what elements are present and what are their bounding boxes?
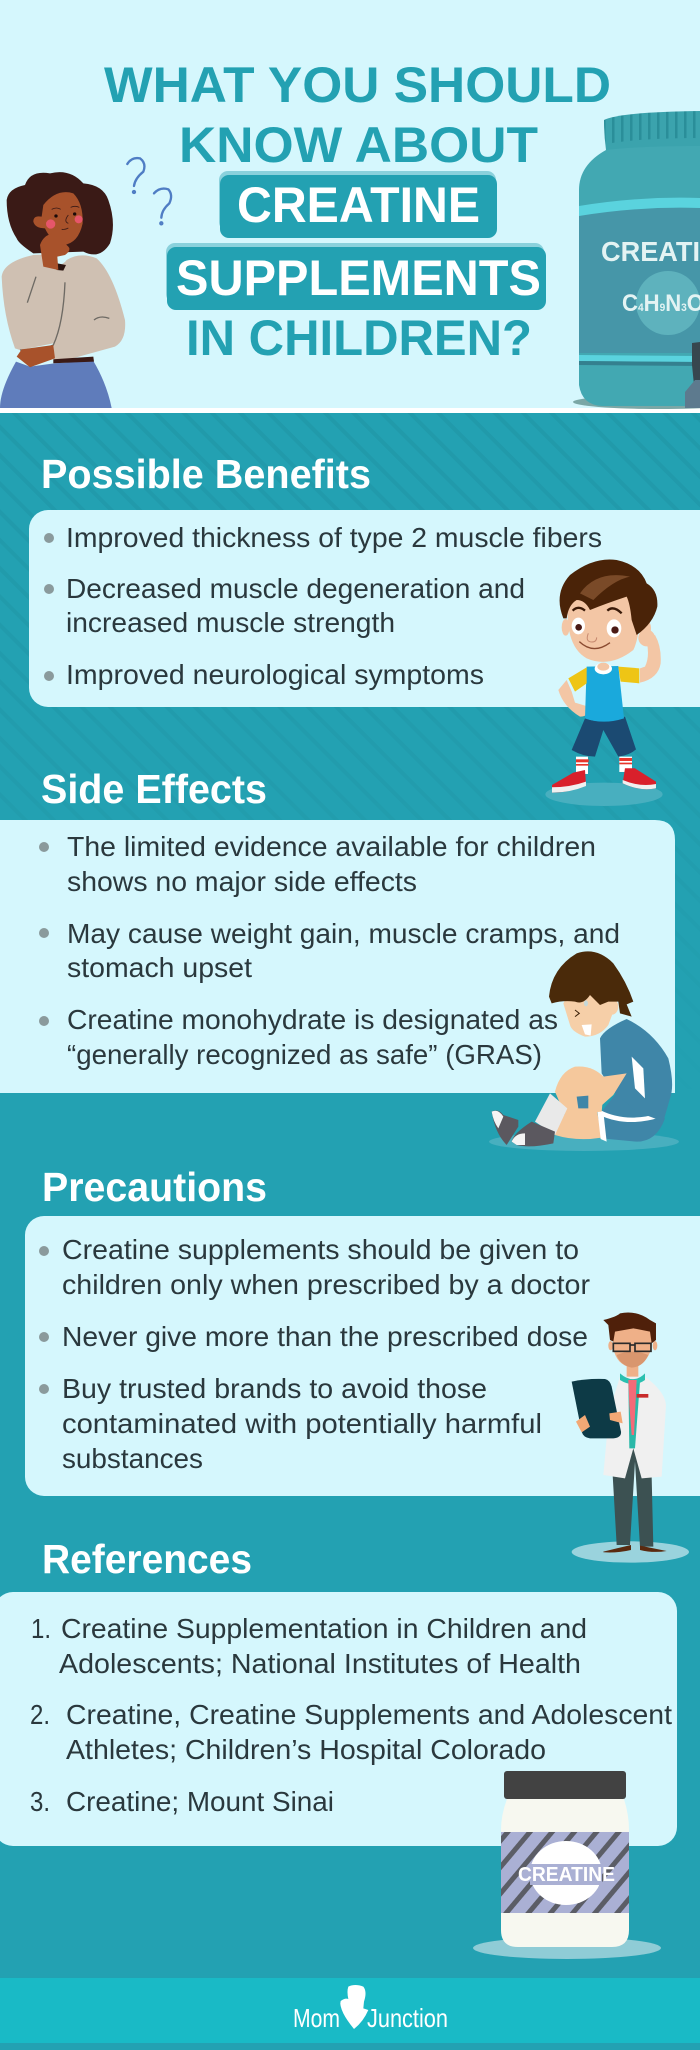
title: CREATINE (237, 177, 480, 233)
panel: side effects: Creatine monohydrate is designated as (67, 1004, 558, 1035)
icon: thinking woman (0, 172, 125, 408)
panel: side effects: shows no major side effects (67, 866, 417, 897)
heading: possible benefits: Possible Benefits (41, 451, 371, 497)
white divider band (0, 408, 700, 413)
panel: precautions: contaminated with potentially harmful (62, 1408, 542, 1439)
panel: precautions: children only when prescribed by a doctor (62, 1269, 590, 1300)
panel: possible benefits: Decreased muscle degeneration and (66, 573, 525, 604)
panel: possible benefits: increased muscle strength (66, 607, 395, 638)
panel: precautions: Never give more than the prescribed dose (62, 1321, 588, 1352)
panel: precautions: Creatine supplements should be given to (62, 1234, 579, 1265)
title: KNOW ABOUT (179, 117, 538, 173)
logo: MomJunction (293, 1985, 448, 2033)
panel: references (0, 1592, 677, 1846)
panel: references: Adolescents; National Institutes of Health (59, 1648, 581, 1679)
heading: precautions: Precautions (42, 1164, 267, 1210)
panel: side effects: stomach upset (67, 952, 252, 983)
title: WHAT YOU SHOULD (104, 57, 611, 113)
icon: creatine bottle (573, 111, 700, 409)
panel: possible benefits: Improved neurological symptoms (66, 659, 484, 690)
title (104, 57, 611, 366)
logo: MomJunction: Junction (367, 2003, 448, 2033)
header background (0, 0, 700, 408)
title: IN CHILDREN? (186, 310, 532, 366)
icon: creatine jar: CREATINE (518, 1864, 615, 1886)
panel: side effects: “generally recognized as safe” (GRAS) (67, 1039, 542, 1070)
heading: references: References (42, 1536, 252, 1582)
heading: side effects: Side Effects (41, 766, 267, 812)
panel: references: Creatine Supplementation in Children and (61, 1613, 587, 1644)
logo: MomJunction: Mom (293, 2003, 340, 2033)
panel: references: Creatine, Creatine Supplements and Adolescent (66, 1699, 672, 1730)
panel: references: 3. (30, 1786, 50, 1817)
icon: creatine jar (473, 1771, 661, 1959)
icon: question marks (127, 158, 171, 224)
panel: references: Athletes; Children’s Hospital Colorado (66, 1734, 546, 1765)
panel: references: 2. (30, 1699, 50, 1730)
panel: side effects (0, 820, 675, 1093)
icon: flexing boy (545, 559, 663, 806)
panel: references: 1. (31, 1613, 51, 1644)
main teal background (0, 413, 700, 1979)
title: SUPPLEMENTS (176, 250, 541, 306)
icon: doctor with tablet (572, 1312, 689, 1563)
panel: possible benefits (29, 510, 700, 707)
panel: references: Creatine; Mount Sinai (66, 1786, 334, 1817)
panel: side effects: May cause weight gain, muscle cramps, and (67, 918, 620, 949)
panel: precautions (25, 1216, 700, 1496)
panel: possible benefits: Improved thickness of type 2 muscle fibers (66, 522, 602, 553)
footer band (0, 1978, 700, 2043)
icon: boy holding knee (489, 951, 679, 1151)
panel: precautions: Buy trusted brands to avoid those (62, 1373, 487, 1404)
panel: precautions: substances (62, 1443, 203, 1474)
panel: side effects: The limited evidence available for children (67, 831, 596, 862)
